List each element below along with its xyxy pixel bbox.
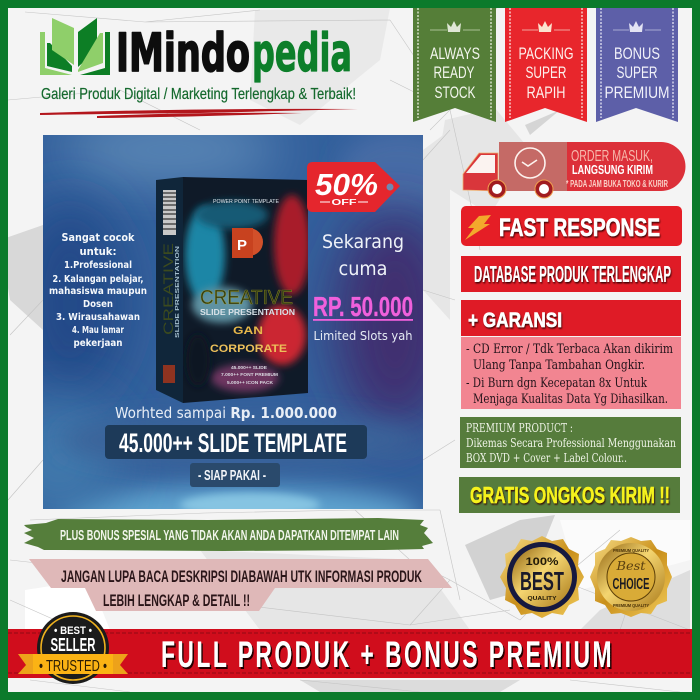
worth text: Worhted sampai Rp. 1.000.000 (115, 404, 337, 422)
icon: powerpoint (232, 228, 263, 258)
product box (156, 177, 310, 403)
ribbon: always ready stock: ALWAYS (430, 45, 480, 63)
icon: lightning (465, 215, 491, 240)
ribbon: packing super rapih: SUPER (526, 64, 567, 82)
product box: SLIDE PRESENTATION (175, 246, 181, 338)
box top label: POWER POINT TEMPLATE (213, 199, 279, 205)
price text: cuma (338, 258, 388, 280)
left text: target users: 3. Wirausahawan (56, 312, 140, 323)
left text: target users: 2. Kalangan pelajar, (52, 274, 144, 285)
ribbon: bonus super premium: SUPER (616, 64, 658, 82)
panel: premium product: BOX DVD + Cover + Label Colour.. (466, 450, 627, 465)
logo wordmark: IMindo (116, 23, 250, 84)
left text: target users: pekerjaan (74, 338, 122, 349)
discount tag 50% off: OFF (332, 198, 357, 207)
panel: slide template (105, 425, 367, 459)
discount tag 50% off: 50% (315, 167, 378, 202)
left text: target users: 4. Mau lamar (72, 325, 124, 336)
ribbon: bonus super premium: PREMIUM (604, 84, 670, 102)
tagline: Galeri Produk Digital / Marketing Terlengkap & Terbaik! (41, 86, 356, 103)
product box: SLIDE PRESENTATION (200, 308, 295, 317)
product box: CORPORATE (210, 343, 287, 355)
red underline strokes (40, 109, 358, 118)
price text: Sekarang (322, 231, 404, 253)
banner: fast response (461, 206, 682, 246)
banner: database produk (461, 256, 681, 292)
left text: target users: Dosen (83, 299, 113, 310)
panel: garansi (461, 300, 681, 409)
bottom banner: full produk (8, 629, 692, 678)
badge: 100% best quality: 100% (526, 556, 559, 568)
truck wheels (488, 180, 553, 198)
ribbon: bonus super premium: BONUS (614, 45, 660, 63)
badge: 100% best quality: BEST (520, 566, 564, 596)
ribbon: packing super rapih: PACKING (518, 45, 574, 63)
panel: siap pakai: - SIAP PAKAI - (198, 467, 266, 484)
callout: jangan lupa baca (29, 559, 452, 611)
panel: slide template: 45.000++ SLIDE TEMPLATE (119, 428, 347, 458)
ribbon: packing super rapih (505, 8, 587, 122)
ribbon: always ready stock: STOCK (434, 84, 476, 102)
price text: RP. 50.000 (313, 291, 413, 322)
badge: best seller trusted: • TRUSTED • (39, 658, 107, 675)
truck: order masuk langsung kirim: LANGSUNG KIRIM (572, 162, 653, 177)
ribbon: always ready stock (413, 8, 496, 122)
badge: 100% best quality: QUALITY (528, 596, 557, 602)
panel: premium product: PREMIUM PRODUCT : (466, 420, 573, 435)
panel: garansi: - Di Burn dgn Kecepatan 8x Untuk (466, 376, 647, 391)
ribbon: always ready stock: READY (434, 64, 474, 82)
product box: 7.000++ FONT PREMIUM (221, 372, 278, 377)
panel: siap pakai (190, 463, 280, 487)
icon: clock (515, 148, 545, 178)
panel: product poster (43, 135, 423, 509)
box titles: CREATIVE (200, 287, 293, 309)
panel: garansi: + GARANSI (468, 309, 562, 332)
left text: target users: untuk: (80, 245, 116, 258)
price text (313, 231, 413, 343)
icon: powerpoint: P (237, 237, 247, 254)
badge: best seller trusted (18, 612, 128, 684)
callout: jangan lupa baca: JANGAN LUPA BACA DESKRIPSI DIABAWAH UTK INFORMASI PRODUK (61, 567, 422, 586)
ribbon: bonus super premium (596, 8, 678, 122)
truck: order masuk langsung kirim (463, 142, 685, 198)
badge: best choice: CHOICE (612, 576, 650, 593)
logo wordmark: pedia (252, 23, 352, 84)
product box: 45.000++ SLIDE (231, 365, 267, 370)
badge: 100% best quality (500, 536, 584, 618)
box spine title: CREATIVE (160, 243, 176, 335)
discount tag 50% off (307, 162, 400, 212)
product box: 5.000++ ICON PACK (227, 380, 274, 385)
brush banner: plus bonus: PLUS BONUS SPESIAL YANG TIDAK AKAN ANDA DAPATKAN DITEMPAT LAIN (60, 528, 399, 544)
icon: open book (40, 18, 110, 75)
badge: best choice: Best (615, 559, 646, 573)
truck: order masuk langsung kirim: ORDER MASUK, (571, 148, 653, 165)
callout: jangan lupa baca: LEBIH LENGKAP & DETAIL !! (103, 591, 250, 610)
panel: premium product (460, 417, 681, 468)
left text: target users: mahasiswa maupun (49, 286, 147, 297)
ribbon: packing super rapih: RAPIH (526, 84, 566, 102)
badge: best seller trusted: SELLER (50, 635, 96, 655)
badge: best choice (590, 537, 672, 617)
badge: best choice: PREMIUM QUALITY (613, 548, 649, 553)
badge: best choice: PREMIUM QUALITY (613, 603, 649, 608)
product box: GAN (233, 325, 263, 337)
logo block (40, 18, 358, 118)
barcode (163, 190, 176, 235)
left text: target users: 1.Professional (64, 260, 132, 271)
brush banner: plus bonus (24, 518, 433, 551)
price text: Limited Slots yah (314, 329, 412, 343)
banner: gratis ongkos kirim (459, 477, 680, 513)
panel: garansi: Ulang Tanpa Tambahan Ongkir. (473, 358, 645, 373)
left text: target users: Sangat cocok (62, 231, 135, 244)
badge: best seller trusted: • BEST • (54, 625, 92, 637)
left text: target users (49, 231, 147, 349)
